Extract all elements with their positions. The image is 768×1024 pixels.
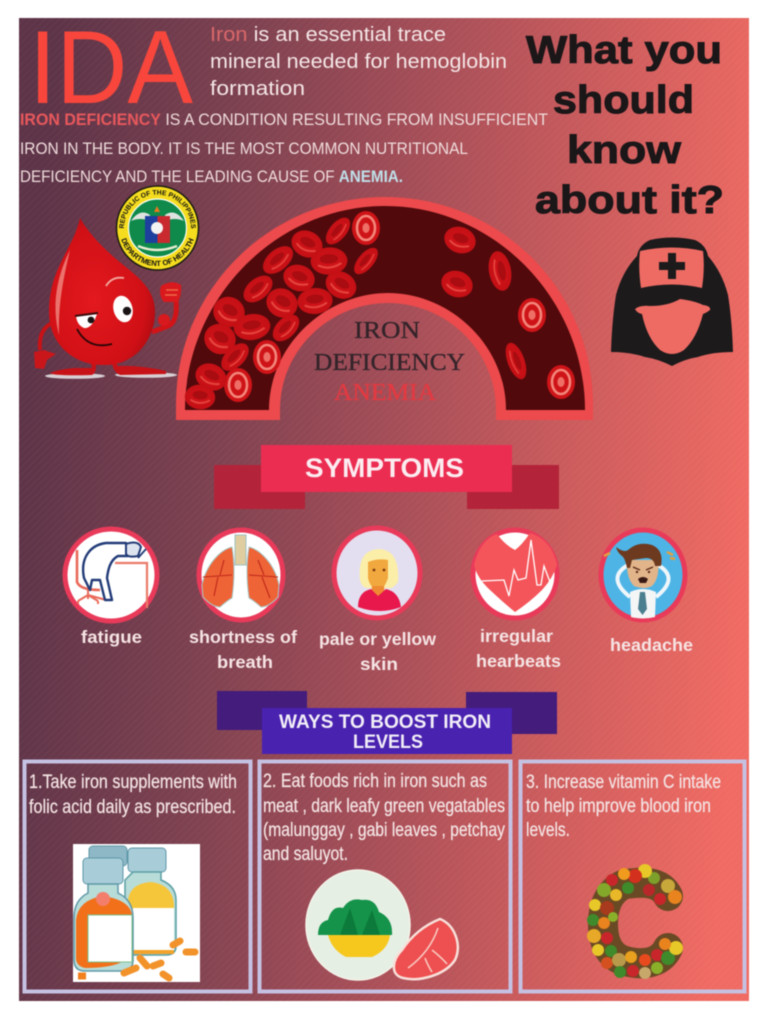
- heading: what you should know about it: know: [567, 129, 682, 172]
- foods text: and saluyot.: [263, 843, 348, 865]
- symptom labels: [81, 626, 693, 674]
- arch label: IRON: [354, 318, 420, 344]
- text block: iron definition: mineral needed for hemoglobin: [210, 51, 507, 73]
- foods text: (malunggay , gabi leaves , petchay: [263, 819, 505, 841]
- symptom labels: irregular: [480, 626, 553, 646]
- icon: department of health seal: [115, 184, 200, 272]
- icon: fatigue: [65, 529, 157, 621]
- heading: what you should know about it: about it?: [535, 179, 724, 222]
- icon: lungs: [199, 530, 283, 620]
- text block: iron deficiency definition: IRON DEFICIENCY IS A CONDITION RESULTING FROM INSUFFICIENT: [20, 110, 548, 129]
- panel: vitamin C: [520, 762, 744, 992]
- text block: iron deficiency definition: [20, 110, 548, 186]
- foods text: meat , dark leafy green vegatables: [263, 795, 505, 817]
- heading: what you should know about it: should: [553, 79, 694, 122]
- image: greens and meat: [306, 870, 458, 980]
- supplements text: folic acid daily as prescribed.: [29, 796, 236, 818]
- text block: iron definition: Iron is an essential trace: [210, 24, 446, 46]
- heading: what you should know about it: [526, 29, 724, 222]
- text block: iron definition: formation: [210, 78, 305, 100]
- vitamin C text: [526, 771, 721, 841]
- vitamin C text: levels.: [526, 819, 570, 841]
- arch label: ANEMIA: [334, 380, 437, 406]
- arch label: DEFICIENCY: [314, 350, 465, 376]
- symptom labels: fatigue: [81, 627, 142, 647]
- vitamin C text: to help improve blood iron: [526, 795, 711, 817]
- panel: foods rich in iron: [260, 762, 510, 992]
- title: IDA: IDA: [29, 10, 194, 126]
- banner: ways to boost iron levels: WAYS TO BOOST IRON: [279, 712, 491, 733]
- banner: ways to boost iron levels: [217, 691, 557, 754]
- icon: department of health seal: REPUBLIC OF THE PHILIPPINES: [118, 189, 196, 230]
- banner: symptoms: SYMPTOMS: [305, 453, 464, 483]
- text block: iron deficiency definition: IRON IN THE BODY. IT IS THE MOST COMMON NUTRITIONAL: [20, 139, 468, 158]
- image: letter C made of fruit: [587, 864, 683, 979]
- icon: blood drop mascot: [34, 218, 181, 379]
- icon: nurse: [611, 238, 733, 366]
- icon: pale or yellow skin: [334, 528, 420, 618]
- symptom labels: pale or yellow: [319, 629, 436, 649]
- icon: department of health seal: DEPARTMENT OF HEALTH: [120, 238, 194, 267]
- symptom labels: breath: [217, 652, 273, 672]
- chart: iron deficiency artery arch: [176, 197, 593, 420]
- text block: iron deficiency definition: DEFICIENCY AND THE LEADING CAUSE OF ANEMIA.: [20, 167, 403, 186]
- symptom labels: headache: [610, 635, 693, 655]
- supplements text: [29, 771, 237, 818]
- symptom labels: hearbeats: [476, 651, 561, 671]
- icon: headache: [601, 530, 685, 620]
- banner: symptoms: [214, 445, 559, 509]
- text block: iron definition: [210, 24, 507, 100]
- icon: irregular heartbeats: [473, 530, 557, 618]
- banner: ways to boost iron levels: LEVELS: [353, 732, 423, 753]
- foods text: 2. Eat foods rich in iron such as: [263, 770, 487, 792]
- image: pill bottles: [73, 844, 200, 982]
- supplements text: 1.Take iron supplements with: [29, 771, 237, 793]
- symptom labels: skin: [360, 654, 398, 674]
- foods text: [263, 770, 505, 865]
- panel: iron supplements: [24, 762, 250, 992]
- symptom labels: shortness of: [189, 627, 297, 647]
- red blood cells: [184, 211, 575, 411]
- vitamin C text: 3. Increase vitamin C intake: [526, 771, 721, 793]
- arch label: [314, 318, 465, 406]
- heading: what you should know about it: What you: [526, 29, 722, 72]
